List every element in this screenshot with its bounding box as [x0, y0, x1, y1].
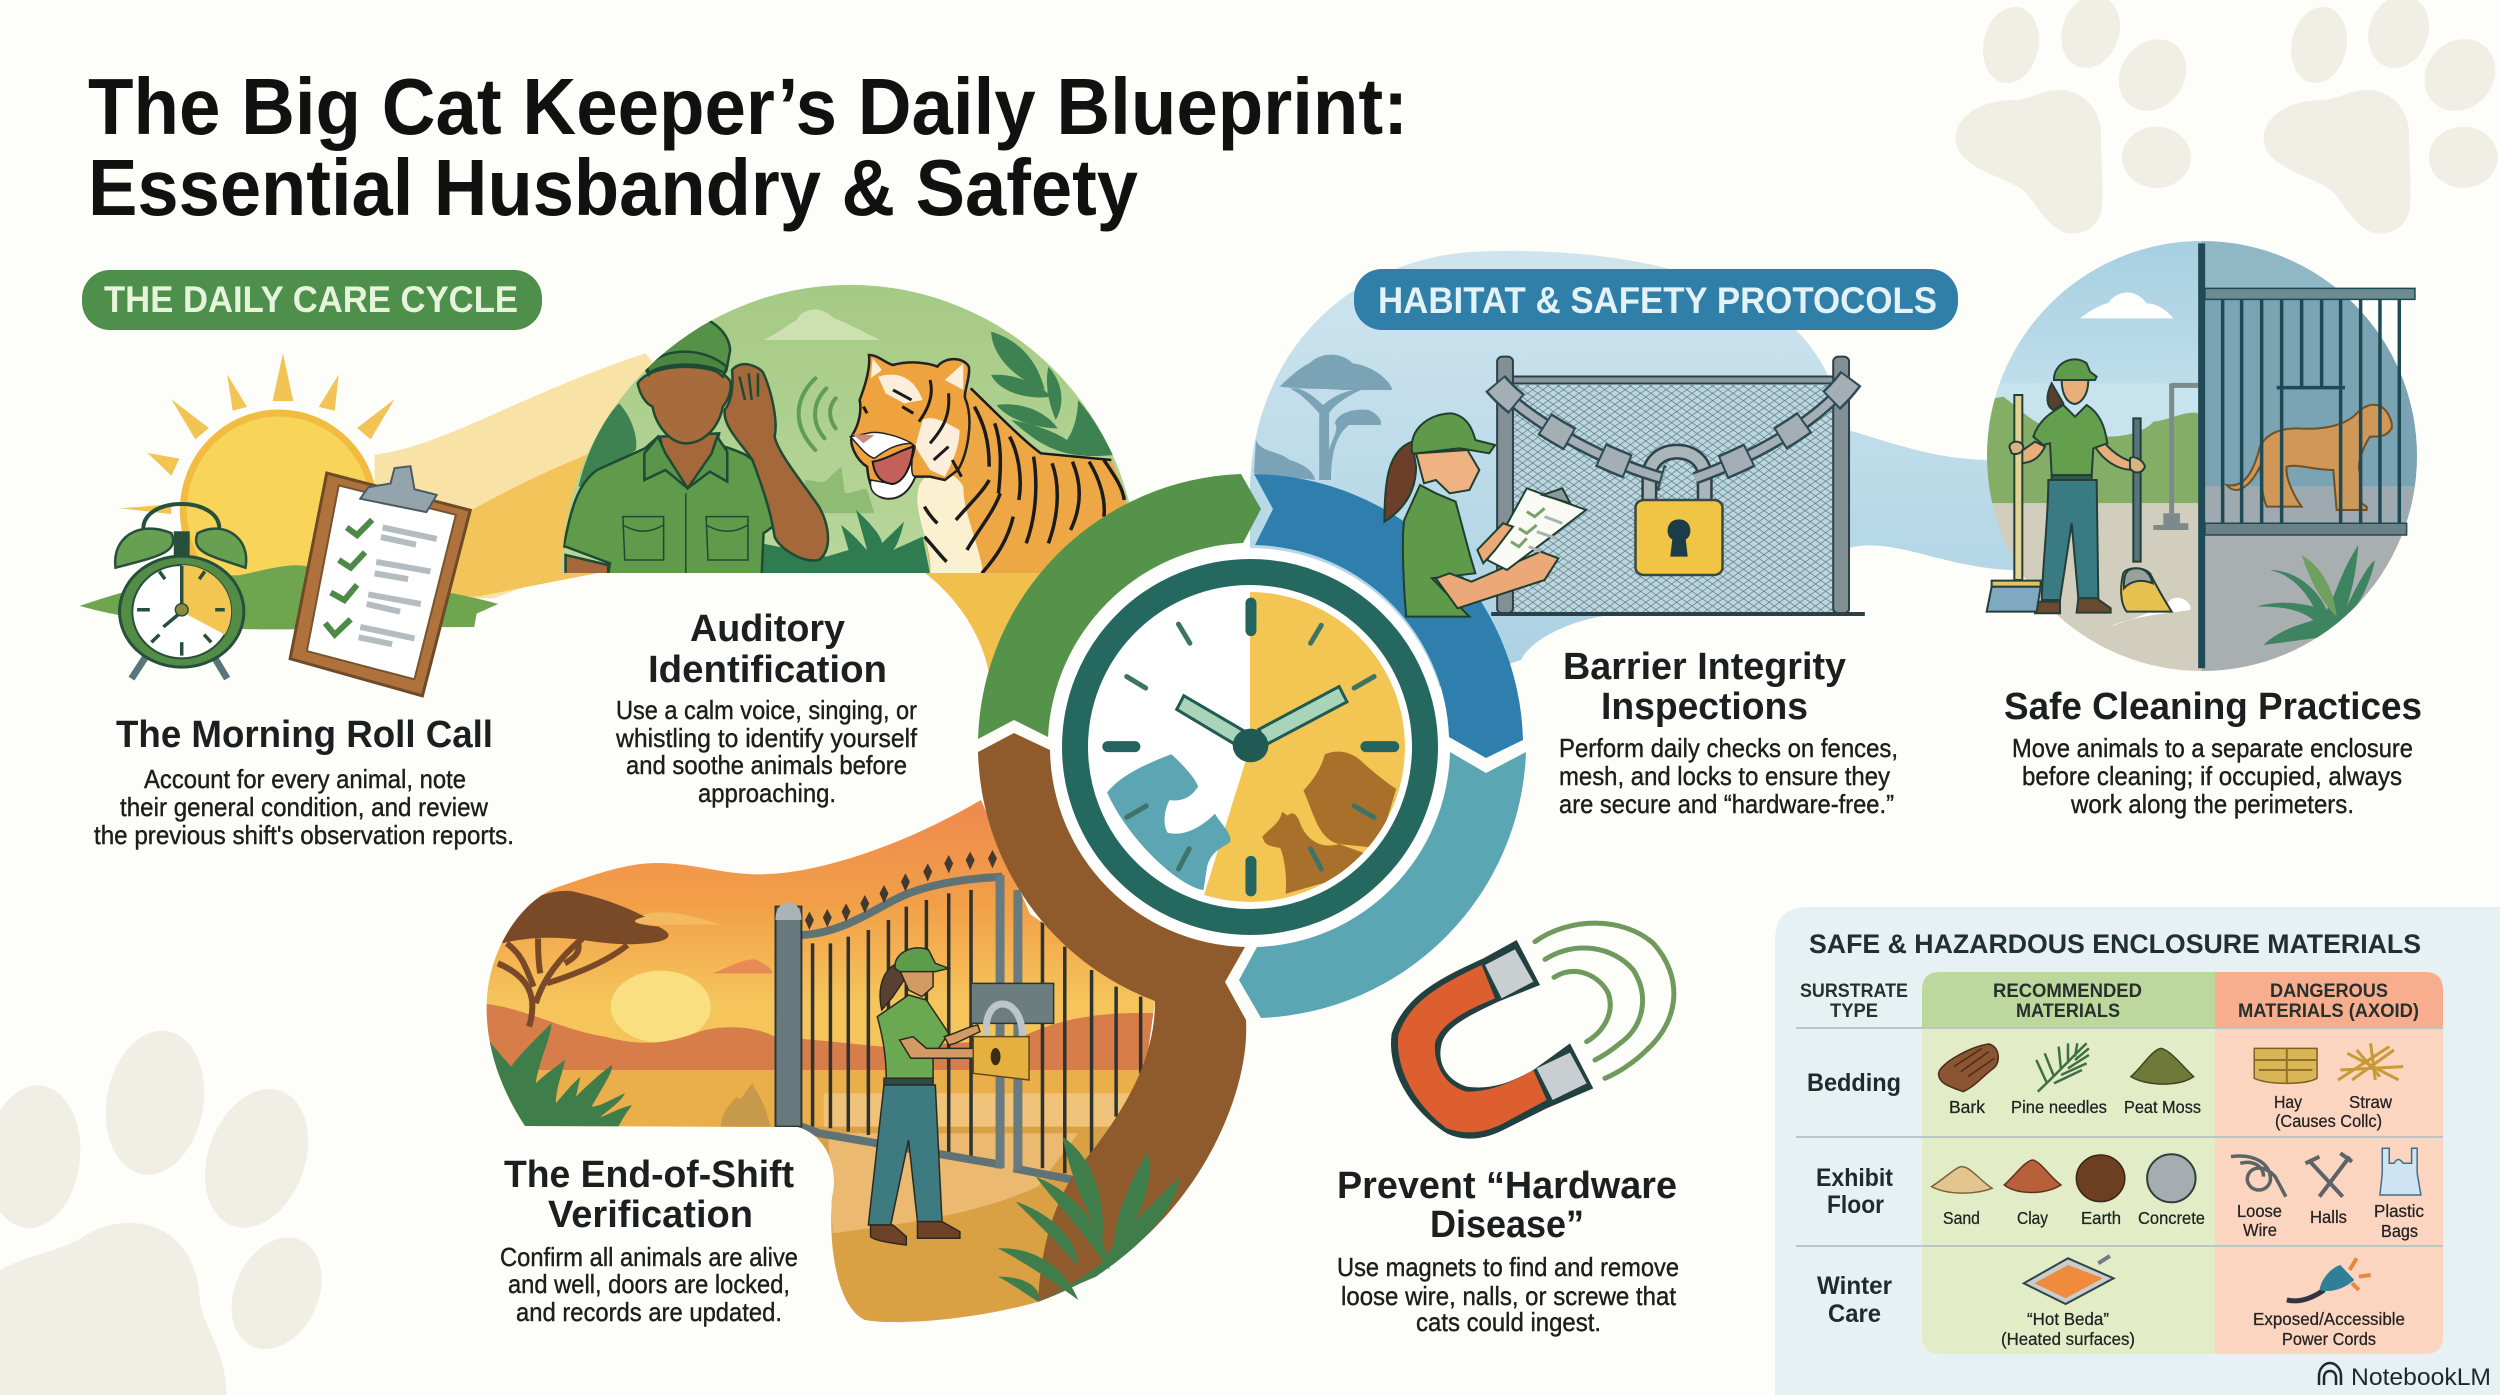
- title: Essential Husbandry & Safety: [88, 143, 1138, 232]
- text block: morning roll call: The Morning Roll Call: [116, 714, 493, 756]
- row: bedding: [1807, 1069, 2392, 1131]
- clouds: [627, 912, 721, 925]
- row: exhibit floor: Wire: [2243, 1220, 2277, 1240]
- text block: auditory identification: and soothe animals before: [626, 750, 907, 780]
- row: exhibit floor: Exhibit: [1816, 1164, 1894, 1192]
- row: exhibit floor: Loose: [2237, 1201, 2282, 1221]
- savanna plain: [480, 1070, 1159, 1130]
- figure: tiger: [850, 355, 1126, 575]
- icon: sand pile: [1932, 1167, 1992, 1193]
- dangerous column: [2215, 1028, 2443, 1354]
- brown cat silhouettes: [1262, 752, 1396, 894]
- clock halo: [1051, 548, 1449, 946]
- scene background: [1980, 240, 2420, 682]
- section pill: daily care cycle: [82, 270, 542, 330]
- text block: safe cleaning practices: Safe Cleaning Practices: [2004, 686, 2422, 728]
- sun: [611, 971, 711, 1043]
- icon: clay pile: [2004, 1160, 2061, 1192]
- spill: [2110, 598, 2191, 627]
- text block: end of shift verification: [500, 1154, 798, 1327]
- text block: barrier integrity inspections: Perform daily checks on fences,: [1559, 733, 1898, 763]
- section pill: daily care cycle: THE DAILY CARE CYCLE: [104, 279, 518, 320]
- row: exhibit floor: [1816, 1164, 2424, 1241]
- row: winter care: (Heated surfaces): [2001, 1329, 2135, 1349]
- row: bedding: Peat Moss: [2124, 1097, 2201, 1117]
- panel: auditory identification illustration: [550, 280, 1150, 580]
- ground path: [674, 1126, 1110, 1322]
- row: winter care: [1817, 1272, 2405, 1349]
- text block: morning roll call: [94, 714, 514, 850]
- icon: earth: [2076, 1155, 2125, 1202]
- row: exhibit floor: Concrete: [2138, 1208, 2205, 1228]
- text block: barrier integrity inspections: [1559, 646, 1898, 819]
- icon: hot bed: [2024, 1256, 2114, 1304]
- text block: end of shift verification: and well, doors are locked,: [508, 1269, 790, 1299]
- text block: end of shift verification: The End-of-Shift: [504, 1154, 794, 1196]
- dangerous header: [2215, 972, 2443, 1028]
- text block: prevent hardware disease: Prevent “Hardware: [1337, 1165, 1677, 1207]
- cage bars: [2205, 288, 2415, 535]
- icon: peat moss: [2131, 1048, 2194, 1084]
- title: The Big Cat Keeper’s Daily Blueprint:: [88, 62, 1408, 151]
- figure: keeper with brooms: [1987, 359, 2172, 613]
- ground: [1992, 503, 2202, 671]
- text block: end of shift verification: Verification: [548, 1194, 753, 1236]
- text block: safe cleaning practices: [2004, 686, 2422, 819]
- paw print top left: [1955, 0, 2198, 234]
- section pill: habitat and safety: [1354, 269, 1958, 330]
- yellow wave: [375, 353, 717, 598]
- title: [88, 62, 1408, 232]
- tick marks: [1108, 603, 1394, 891]
- panel: safe cleaning illustration: [1980, 240, 2420, 682]
- text block: barrier integrity inspections: mesh, and locks to ensure they: [1559, 761, 1890, 791]
- icon: concrete: [2147, 1154, 2196, 1202]
- clock hands: [1177, 696, 1245, 745]
- text block: safe cleaning practices: work along the perimeters.: [2070, 789, 2354, 819]
- yellow wave lower band: [375, 441, 622, 596]
- text block: prevent hardware disease: [1337, 1165, 1679, 1337]
- figure: keeper: [564, 315, 828, 575]
- column headers: MATERIALS: [2016, 1001, 2120, 1022]
- text block: auditory identification: [615, 608, 918, 808]
- text block: end of shift verification: and records are updated.: [516, 1297, 782, 1327]
- magnet poles: [1485, 949, 1533, 998]
- material icons: [1932, 1043, 2421, 1304]
- recommended header: [1922, 972, 2215, 1028]
- column headers: SURSTRATE: [1800, 981, 1908, 1002]
- section pill: habitat and safety: HABITAT & SAFETY PROTOCOLS: [1378, 280, 1937, 321]
- magnetic field lines: [1535, 923, 1674, 1078]
- row: winter care: “Hot Beda”: [2027, 1309, 2109, 1329]
- column headers: TYPE: [1830, 1001, 1878, 1022]
- panel background: [1775, 907, 2500, 1395]
- recommended column: [1922, 1028, 2215, 1354]
- grass: [489, 1023, 632, 1127]
- panel: morning illustration: [80, 353, 717, 696]
- panel: end of shift illustration: [470, 790, 1170, 1323]
- text block: safe cleaning practices: before cleaning; if occupied, always: [2022, 761, 2402, 791]
- post: [2172, 383, 2198, 513]
- acacia tree: [498, 891, 669, 1027]
- arc segment: teal: [1239, 752, 1526, 1018]
- panel: safe and hazardous enclosure materials: [1775, 907, 2500, 1395]
- plant: [2257, 545, 2375, 645]
- icon: pine needles: [2036, 1043, 2089, 1092]
- text block: barrier integrity inspections: Barrier Integrity: [1563, 646, 1846, 688]
- hills: [480, 1003, 1159, 1073]
- row: winter care: Care: [1828, 1300, 1881, 1328]
- row rules: [1796, 1028, 2443, 1246]
- column headers: [1800, 981, 2419, 1022]
- figure: keeper with clipboard: [1384, 413, 1586, 617]
- row: winter care: Exposed/Accessible: [2253, 1309, 2405, 1329]
- cloud: [764, 310, 880, 340]
- sunset sky: [470, 790, 1170, 1120]
- arc segment: green: [978, 474, 1261, 739]
- icon: loose wire: [2231, 1156, 2286, 1197]
- arc segment: brown: [978, 733, 1246, 1302]
- icon: clipboard: [290, 466, 470, 696]
- text block: barrier integrity inspections: Inspections: [1601, 686, 1808, 728]
- row: exhibit floor: Bags: [2381, 1221, 2418, 1241]
- row: exhibit floor: Clay: [2017, 1208, 2048, 1228]
- clock: [1051, 548, 1449, 946]
- gate: [775, 850, 1141, 1180]
- distant tree silhouettes: [1254, 355, 1392, 480]
- yellow wedge: [1204, 592, 1405, 902]
- text block: prevent hardware disease: cats could ingest.: [1416, 1307, 1601, 1337]
- chain: [1495, 378, 1851, 478]
- icon: plastic bag: [2380, 1148, 2421, 1195]
- clock bezel: [1075, 572, 1425, 922]
- scene background: [550, 280, 1150, 580]
- column headers: MATERIALS (AXOID): [2238, 1001, 2419, 1022]
- column headers: RECOMMENDED: [1993, 981, 2142, 1002]
- column headers: DANGEROUS: [2270, 981, 2388, 1002]
- text block: morning roll call: Account for every animal, note: [144, 764, 466, 794]
- row: exhibit floor: Earth: [2081, 1208, 2121, 1228]
- row: exhibit floor: Floor: [1827, 1191, 1884, 1219]
- row: winter care: Power Cords: [2282, 1329, 2376, 1349]
- row: exhibit floor: Halls: [2310, 1207, 2347, 1227]
- row: bedding: Bedding: [1807, 1069, 1901, 1097]
- text block: auditory identification: Identification: [648, 649, 887, 691]
- text block: prevent hardware disease: Use magnets to find and remove: [1337, 1252, 1679, 1282]
- paw print bottom left: [0, 1023, 339, 1395]
- hills: [80, 565, 498, 629]
- figure: cougar: [2227, 405, 2392, 510]
- icon: power plug: [2287, 1258, 2371, 1301]
- sound waves: [799, 378, 836, 450]
- text block: safe cleaning practices: Move animals to a separate enclosure: [2012, 733, 2413, 763]
- text block: prevent hardware disease: loose wire, nalls, or screwe that: [1341, 1281, 1677, 1311]
- divider: [2198, 243, 2205, 668]
- text block: barrier integrity inspections: are secure and “hardware-free.”: [1559, 789, 1894, 819]
- trees: [1987, 397, 2198, 503]
- icon: padlock on gate: [973, 1004, 1029, 1080]
- yellow connector under tiger scene: [925, 573, 1042, 680]
- text block: morning roll call: the previous shift's observation reports.: [94, 820, 514, 850]
- icon: magnet: [1391, 923, 1674, 1139]
- foliage: [578, 332, 1113, 573]
- text block: auditory identification: approaching.: [698, 778, 836, 808]
- figure: keeper locking the gate: [868, 948, 980, 1245]
- icon: hay bale: [2254, 1048, 2317, 1083]
- row: bedding: Hay: [2274, 1092, 2302, 1112]
- icon: straw: [2338, 1043, 2403, 1080]
- foreground grass over brown band: [998, 1137, 1180, 1302]
- row: bedding: Straw: [2349, 1092, 2392, 1112]
- icon: padlock: [1636, 500, 1723, 575]
- row: bedding: (Causes Collc): [2275, 1111, 2382, 1131]
- text block: prevent hardware disease: Disease”: [1430, 1204, 1584, 1246]
- fence: [1491, 357, 1865, 614]
- icon: nails: [2305, 1153, 2352, 1197]
- icon: bark: [1939, 1044, 1998, 1092]
- panel heading: SAFE & HAZARDOUS ENCLOSURE MATERIALS: [1809, 929, 2421, 959]
- teal cat silhouette: [1107, 754, 1230, 890]
- enclosure wall: [2202, 241, 2336, 288]
- icon: padlock shackle: [1649, 452, 1705, 507]
- icon: alarm clock: [115, 504, 246, 679]
- row: winter care: Winter: [1817, 1272, 1892, 1300]
- text block: auditory identification: Use a calm voice, singing, or: [616, 695, 917, 725]
- panel: barrier background wave: [1250, 251, 2040, 700]
- text block: morning roll call: their general condition, and review: [120, 792, 488, 822]
- text block: auditory identification: whistling to identify yourself: [615, 723, 918, 753]
- row: exhibit floor: Plastic: [2374, 1201, 2424, 1221]
- logo: NotebookLM: NotebookLM: [2351, 1364, 2491, 1391]
- cloud: [2080, 292, 2173, 318]
- row: exhibit floor: Sand: [1943, 1208, 1980, 1228]
- icon: sun: [120, 353, 395, 608]
- arc segment: blue: [1254, 474, 1523, 758]
- light blue blob and wave: [1250, 251, 2040, 700]
- paw print top right: [2264, 0, 2500, 234]
- panel: barrier integrity illustration: [1384, 357, 1865, 617]
- panel: daily cycle ring: [978, 474, 1526, 1018]
- row: bedding: Pine needles: [2011, 1097, 2107, 1117]
- row: bedding: Bark: [1949, 1097, 1985, 1117]
- clock face: [1095, 592, 1405, 902]
- text block: auditory identification: Auditory: [690, 608, 845, 650]
- text block: end of shift verification: Confirm all animals are alive: [500, 1242, 798, 1272]
